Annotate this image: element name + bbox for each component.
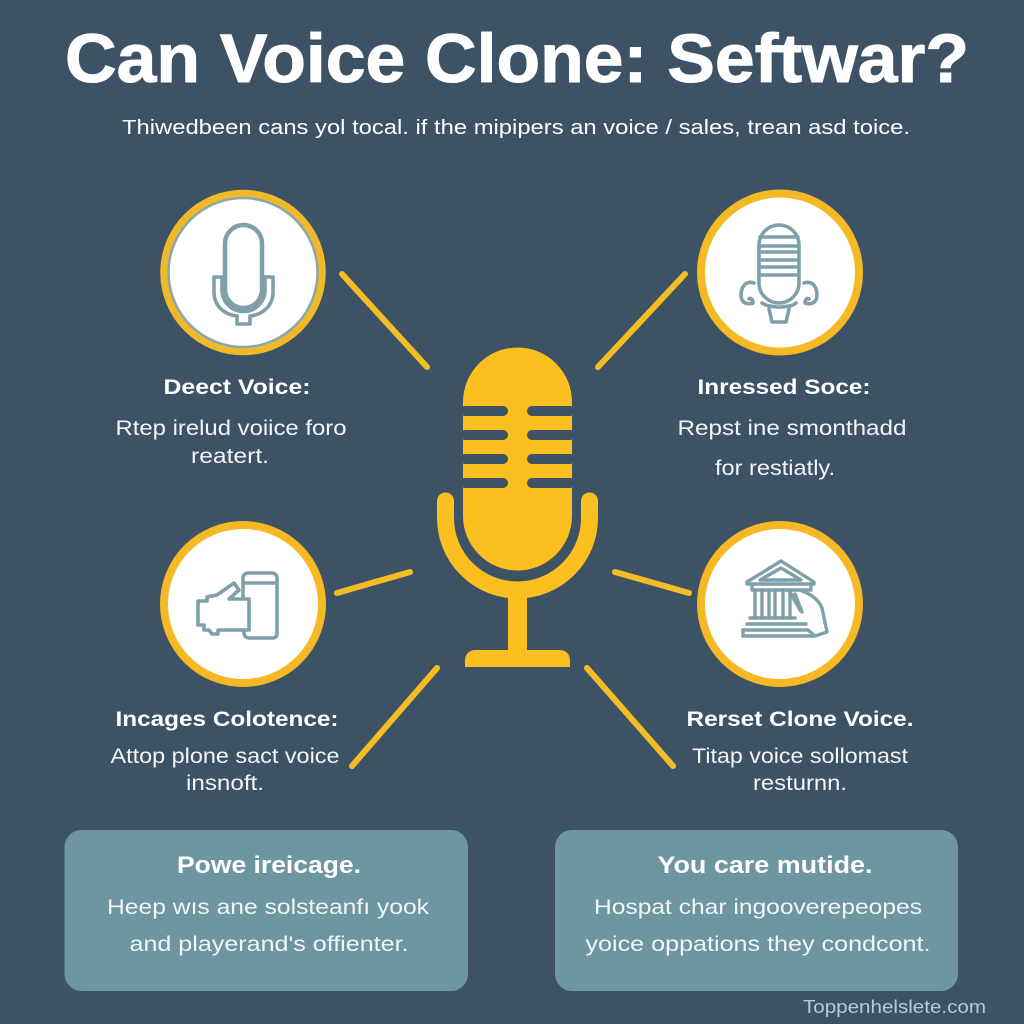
icon: top-left microphone badge xyxy=(164,194,322,352)
text block: top left: Deect Voice: xyxy=(164,376,310,399)
icon: bottom-left thumbs-up phone badge xyxy=(164,525,322,683)
subtitle: Thiwedbeen cans yol tocal. if the mipipers an voice / sales, trean asd toice. xyxy=(122,116,910,139)
text block: bottom right xyxy=(686,708,914,795)
icon: top-right studio microphone badge xyxy=(701,194,859,352)
text block: bottom right: Rerset Clone Voice. xyxy=(686,708,914,731)
text block: top right: Repst ine smonthadd xyxy=(678,417,906,440)
title: Can Voice Clone: Seftwar? xyxy=(65,20,969,97)
text block: bottom left: Incages Colotence: xyxy=(116,708,338,731)
text block: top left xyxy=(116,376,346,468)
panel body: left xyxy=(107,896,430,956)
text block: top left: reatert. xyxy=(191,445,269,468)
central microphone icon xyxy=(446,347,590,667)
panel heading: left: Powe ireicage. xyxy=(177,852,361,879)
panel body: right: Hospat char ingooverepeopes xyxy=(594,896,922,919)
text block: top right: for restiatly. xyxy=(715,457,835,480)
text block: bottom left xyxy=(110,708,340,795)
text block: top right xyxy=(678,376,906,480)
text block: top right: Inressed Soce: xyxy=(698,376,870,399)
panel body: right xyxy=(586,896,930,956)
text block: bottom right: resturnn. xyxy=(753,772,847,795)
text block: bottom right: Titap voice sollomast xyxy=(692,745,908,768)
connector lines xyxy=(337,274,689,766)
text block: bottom left: insnoft. xyxy=(186,772,264,795)
text block: top left: Rtep irelud voiice foro xyxy=(116,417,346,440)
text block: bottom left: Attop plone sact voice xyxy=(110,745,340,768)
panel body: left: Heep wıs ane solsteanfı yook xyxy=(107,896,430,919)
panel: right note xyxy=(555,830,958,991)
panel body: left: and playerand's offienter. xyxy=(130,933,408,956)
panel: left note xyxy=(64,830,468,991)
panel body: right: yoice oppations they condcont. xyxy=(586,933,930,956)
icon: bottom-right temple and hand badge xyxy=(701,525,859,683)
watermark: Toppenhelslete.com xyxy=(803,997,986,1017)
panel heading: right: You care mutide. xyxy=(658,852,872,879)
